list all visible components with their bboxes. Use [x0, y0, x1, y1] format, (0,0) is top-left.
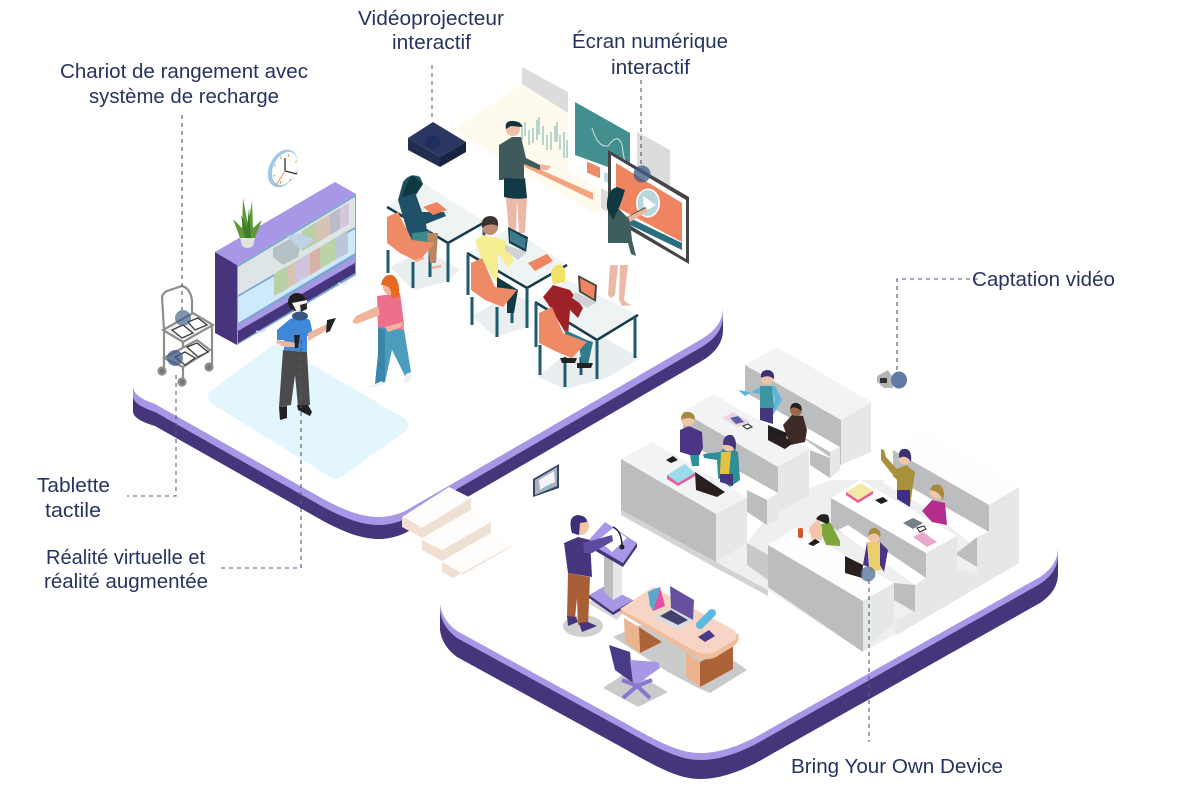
- label: interactive screen: Écran numérique: [572, 30, 728, 53]
- wall projection: [453, 67, 670, 213]
- label: charging cart: [60, 61, 308, 108]
- panel: upper platform: [133, 160, 723, 539]
- amphitheatre: front-right row: [768, 525, 926, 652]
- icon: plant: [233, 198, 262, 248]
- VR floor area: [216, 353, 400, 471]
- label: tablet: tactile: [45, 500, 101, 522]
- amphitheatre floor and base: [716, 480, 1019, 652]
- label: projector: interactif: [392, 32, 471, 54]
- icon: interactive screen: [608, 150, 689, 264]
- icon: projector: [408, 122, 466, 167]
- icon: wall clock: [262, 145, 304, 192]
- marker: BYOD hotspot: [860, 566, 876, 582]
- label: virtual and augmented reality: [44, 547, 208, 593]
- desk group 2: [467, 216, 567, 337]
- label: charging cart: système de recharge: [89, 86, 279, 108]
- amphitheatre: back-left rows: [621, 347, 871, 596]
- marker: screen hotspot: [634, 166, 650, 182]
- desk group 1: [387, 175, 485, 290]
- stairs: [402, 487, 511, 578]
- bookcase: [215, 182, 356, 345]
- label: virtual and augmented reality: réalité augmentée: [44, 571, 208, 593]
- panel: lower platform: [440, 370, 1058, 779]
- label: charging cart: Chariot de rangement avec: [60, 61, 308, 83]
- amphitheatre: back-right rows: [831, 432, 1019, 636]
- label: BYOD: Bring Your Own Device: [791, 756, 1003, 778]
- leader lines: [127, 65, 978, 742]
- students on the right rows: [798, 449, 947, 578]
- person: woman in pink: [352, 275, 411, 388]
- lectern: [587, 522, 637, 620]
- person: woman at the screen: [607, 187, 648, 306]
- icon: wall tablet: [533, 464, 559, 497]
- person: VR user: [276, 293, 336, 420]
- label: tablet: [37, 475, 110, 522]
- icon: video capture camera: [877, 370, 907, 388]
- icon: charging cart: [158, 286, 213, 386]
- office chair: [603, 645, 668, 707]
- label: interactive screen: [572, 30, 728, 79]
- desk group 3: [535, 265, 640, 389]
- label: projector: Vidéoprojecteur: [358, 8, 504, 30]
- label: interactive screen: interactif: [611, 57, 690, 79]
- person: speaker: [563, 515, 613, 637]
- label: virtual and augmented reality: Réalité virtuelle et: [46, 547, 205, 569]
- label: tablet: Tablette: [37, 475, 110, 497]
- students on the left rows: [666, 370, 807, 497]
- label: video capture: Captation vidéo: [972, 269, 1115, 291]
- teacher desk: [613, 586, 747, 693]
- person: teacher: [499, 121, 551, 233]
- label: projector: [358, 8, 504, 54]
